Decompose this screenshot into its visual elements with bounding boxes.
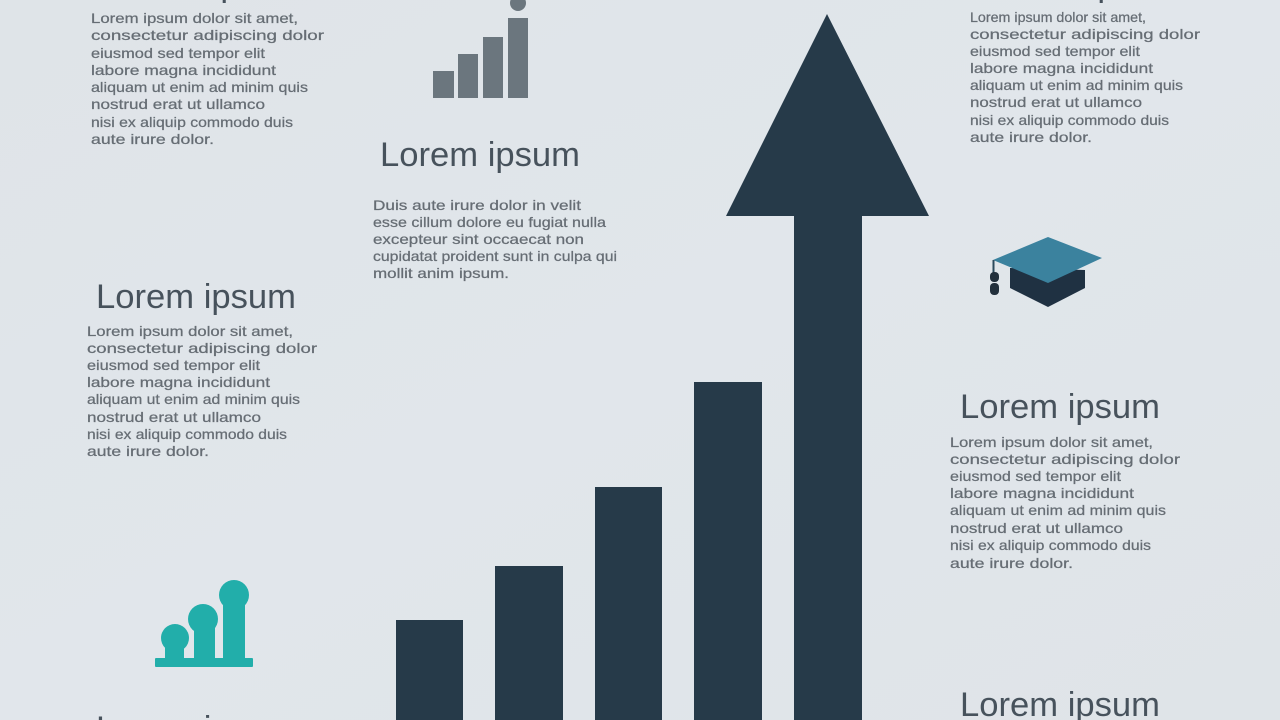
bar chart: rising dark bars — [396, 382, 762, 720]
text block: left: aute irure dolor. — [87, 443, 209, 459]
heading: center: Lorem ipsum — [380, 136, 580, 174]
icon: graduation cap — [990, 237, 1102, 307]
text block: top left: labore magna incididunt — [91, 62, 276, 78]
text block: center: Duis aute irure dolor in velit — [373, 197, 581, 213]
text block: left: consectetur adipiscing dolor — [87, 340, 317, 356]
text block: right — [950, 434, 1180, 571]
text block: top right: nostrud erat ut ullamco — [970, 94, 1142, 110]
heading: right: Lorem ipsum — [960, 388, 1160, 426]
text block: top right: aliquam ut enim ad minim quis — [970, 77, 1183, 93]
text block: right: eiusmod sed tempor elit — [950, 468, 1121, 484]
arrow: large upward arrow — [726, 14, 929, 720]
text block: top right: labore magna incididunt — [970, 60, 1153, 76]
text block: center: esse cillum dolore eu fugiat nulla — [373, 214, 606, 230]
text block: left: labore magna incididunt — [87, 374, 270, 390]
icon: teal rounded bars — [155, 580, 253, 667]
text block: top right: aute irure dolor. — [970, 129, 1092, 145]
icon: gray bar chart — [433, 0, 528, 98]
text block: left: nostrud erat ut ullamco — [87, 409, 261, 425]
text block: left: Lorem ipsum dolor sit amet, — [87, 323, 293, 339]
text block: top right: nisi ex aliquip commodo duis — [970, 112, 1169, 128]
text block: top left — [91, 10, 324, 147]
text block: top left: nisi ex aliquip commodo duis — [91, 114, 293, 130]
text block: right: aliquam ut enim ad minim quis — [950, 502, 1166, 518]
text block: top right: Lorem ipsum dolor sit amet, — [970, 9, 1146, 25]
text block: center — [373, 197, 617, 281]
text block: center: cupidatat proident sunt in culpa qui — [373, 248, 617, 264]
text block: top right: eiusmod sed tempor elit — [970, 43, 1140, 59]
text block: left: eiusmod sed tempor elit — [87, 357, 260, 373]
text block: right: aute irure dolor. — [950, 555, 1073, 571]
text block: top left: aliquam ut enim ad minim quis — [91, 79, 308, 95]
text block: right: consectetur adipiscing dolor — [950, 451, 1180, 467]
text block: left — [87, 323, 317, 459]
text block: top left: aute irure dolor. — [91, 131, 214, 147]
text block: right: nisi ex aliquip commodo duis — [950, 537, 1151, 553]
text block: right: Lorem ipsum dolor sit amet, — [950, 434, 1153, 450]
text block: right: labore magna incididunt — [950, 485, 1134, 501]
text block: center: mollit anim ipsum. — [373, 265, 509, 281]
text block: top left: consectetur adipiscing dolor — [91, 27, 324, 43]
text block: left: nisi ex aliquip commodo duis — [87, 426, 287, 442]
text block: top left: eiusmod sed tempor elit — [91, 45, 265, 61]
text block: top right: consectetur adipiscing dolor — [970, 26, 1200, 42]
text block: top left: Lorem ipsum dolor sit amet, — [91, 10, 298, 26]
text block: right: nostrud erat ut ullamco — [950, 520, 1123, 536]
text block: top left: nostrud erat ut ullamco — [91, 96, 265, 112]
text block: left: aliquam ut enim ad minim quis — [87, 391, 300, 407]
text block: center: excepteur sint occaecat non — [373, 231, 584, 247]
heading: left: Lorem ipsum — [96, 278, 296, 316]
text block: top right — [970, 9, 1200, 145]
